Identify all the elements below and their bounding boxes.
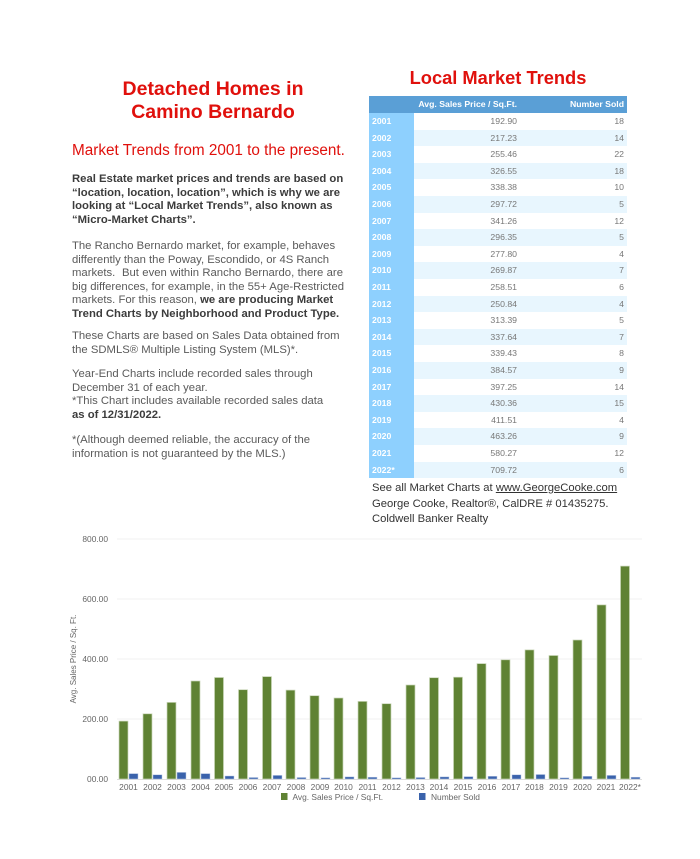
- table: yearly market data: 2006: [372, 199, 391, 209]
- y axis labels: [82, 534, 108, 784]
- table: yearly market data: 2008: [372, 232, 391, 242]
- table: yearly market data: 192.90: [490, 116, 517, 126]
- table: yearly market data: 7: [619, 332, 624, 342]
- title: [123, 78, 303, 123]
- table: yearly market data: 277.80: [490, 249, 517, 259]
- text block: disclaimer: [72, 434, 310, 460]
- text block: market differences: differently than the Poway, Escondido, or 4S Ranch: [72, 254, 329, 266]
- table: yearly market data: 463.26: [490, 431, 517, 441]
- table: yearly market data: 2015: [372, 348, 391, 358]
- table: yearly market data: 430.36: [490, 398, 517, 408]
- table: yearly market data: 2012: [372, 299, 391, 309]
- table: yearly market data: 341.26: [490, 216, 517, 226]
- table: yearly market data: 5: [619, 232, 624, 242]
- text block: market differences: The Rancho Bernardo market, for example, behaves: [72, 240, 335, 252]
- text block: market differences: Trend Charts by Neighborhood and Product Type.: [72, 308, 339, 320]
- table: yearly market data: 2016: [372, 365, 391, 375]
- table: yearly market data: 15: [614, 398, 624, 408]
- title: Detached Homes in: [123, 78, 303, 100]
- table: yearly market data: 338.38: [490, 182, 517, 192]
- x axis labels: 2012: [382, 782, 401, 792]
- x axis labels: 2020: [573, 782, 592, 792]
- table: yearly market data: 8: [619, 348, 624, 358]
- table: yearly market data: 326.55: [490, 166, 517, 176]
- table: yearly market data: 258.51: [490, 282, 517, 292]
- table: yearly market data: Number Sold: [570, 99, 624, 109]
- table: yearly market data: 709.72: [490, 465, 517, 475]
- table: yearly market data: 4: [619, 299, 624, 309]
- table: yearly market data: Avg. Sales Price / Sq.Ft.: [418, 99, 517, 109]
- table: yearly market data: 2022*: [372, 465, 395, 475]
- text block: market differences: markets. For this reason, we are producing Market: [72, 294, 333, 306]
- x axis labels: 2022*: [619, 782, 642, 792]
- text block: market differences: [72, 240, 344, 320]
- text block: intro: “location, location, location”, which is why we are: [72, 187, 340, 199]
- table: yearly market data: 250.84: [490, 299, 517, 309]
- table: yearly market data: 6: [619, 465, 624, 475]
- table: yearly market data: 313.39: [490, 315, 517, 325]
- table: yearly market data: 2014: [372, 332, 391, 342]
- text block: market differences: big differences, for example, in the 55+ Age-Restricted: [72, 281, 344, 293]
- table: yearly market data: 2017: [372, 382, 391, 392]
- text block: intro: Real Estate market prices and trends are based on: [72, 173, 343, 185]
- table: yearly market data: 339.43: [490, 348, 517, 358]
- x axis labels: 2003: [167, 782, 186, 792]
- text block: contact: [372, 482, 618, 525]
- text block: intro: [72, 173, 343, 226]
- table: yearly market data: 12: [614, 448, 624, 458]
- x axis labels: 2015: [454, 782, 473, 792]
- table: yearly market data: 2005: [372, 182, 391, 192]
- x axis labels: 2019: [549, 782, 568, 792]
- table: yearly market data: 2019: [372, 415, 391, 425]
- x axis labels: 2005: [215, 782, 234, 792]
- table: yearly market data: 12: [614, 216, 624, 226]
- table: yearly market data: 9: [619, 365, 624, 375]
- x axis labels: 2018: [525, 782, 544, 792]
- y axis labels: 00.00: [87, 774, 108, 784]
- table: yearly market data: 269.87: [490, 265, 517, 275]
- text block: contact: See all Market Charts at www.GeorgeCooke.com: [372, 482, 617, 494]
- number sold bars: [129, 772, 640, 779]
- legend: [281, 792, 480, 802]
- table: yearly market data: 7: [619, 265, 624, 275]
- text block: disclaimer: information is not guaranteed by the MLS.): [72, 448, 286, 460]
- text block: data source: These Charts are based on Sales Data obtained from: [72, 330, 340, 342]
- x axis labels: 2007: [263, 782, 282, 792]
- table: yearly market data: 4: [619, 415, 624, 425]
- text block: intro: “Micro-Market Charts”.: [72, 214, 196, 226]
- table: yearly market data: 5: [619, 315, 624, 325]
- x axis labels: 2011: [358, 782, 377, 792]
- x axis labels: [119, 782, 642, 792]
- text block: year-end note: as of 12/31/2022.: [72, 409, 161, 421]
- x axis labels: 2008: [287, 782, 306, 792]
- table: yearly market data: 2021: [372, 448, 391, 458]
- text block: year-end note: [72, 368, 324, 421]
- table: yearly market data: 18: [614, 116, 624, 126]
- table: yearly market data: 2004: [372, 166, 391, 176]
- table: yearly market data: 337.64: [490, 332, 517, 342]
- table: yearly market data: 4: [619, 249, 624, 259]
- table: yearly market data: 2010: [372, 265, 391, 275]
- x axis labels: 2002: [143, 782, 162, 792]
- table: yearly market data: 2003: [372, 149, 391, 159]
- table: yearly market data: 2002: [372, 133, 391, 143]
- table: yearly market data: 18: [614, 166, 624, 176]
- table: yearly market data: 580.27: [490, 448, 517, 458]
- table: yearly market data: 2007: [372, 216, 391, 226]
- bar chart: price and number sold: [69, 534, 642, 802]
- table: yearly market data: [369, 96, 627, 478]
- table: yearly market data: 297.72: [490, 199, 517, 209]
- x axis labels: 2001: [119, 782, 138, 792]
- table: yearly market data: 2009: [372, 249, 391, 259]
- table: yearly market data: 2001: [372, 116, 391, 126]
- table: yearly market data: 2018: [372, 398, 391, 408]
- text block: contact: Coldwell Banker Realty: [372, 513, 488, 525]
- text block: year-end note: December 31 of each year.: [72, 382, 208, 394]
- x axis labels: 2006: [239, 782, 258, 792]
- y axis labels: 400.00: [82, 654, 108, 664]
- x axis labels: 2013: [406, 782, 425, 792]
- x axis labels: 2004: [191, 782, 210, 792]
- price bars: [119, 566, 630, 779]
- title: Camino Bernardo: [131, 101, 295, 123]
- table: yearly market data: 10: [614, 182, 624, 192]
- table: yearly market data: 384.57: [490, 365, 517, 375]
- x axis labels: 2021: [597, 782, 616, 792]
- x axis labels: 2017: [502, 782, 521, 792]
- y axis labels: 600.00: [82, 594, 108, 604]
- text block: disclaimer: *(Although deemed reliable, the accuracy of the: [72, 434, 310, 446]
- table: yearly market data: 22: [614, 149, 624, 159]
- y axis labels: 200.00: [82, 714, 108, 724]
- heading: local market trends: Local Market Trends: [410, 67, 586, 88]
- y axis labels: 800.00: [82, 534, 108, 544]
- x axis labels: 2010: [334, 782, 353, 792]
- table: yearly market data: 2013: [372, 315, 391, 325]
- table: yearly market data: 397.25: [490, 382, 517, 392]
- text block: data source: the SDMLS® Multiple Listing System (MLS)*.: [72, 344, 298, 356]
- table: yearly market data: 2020: [372, 431, 391, 441]
- table: yearly market data: 296.35: [490, 232, 517, 242]
- y axis title: Avg. Sales Price / Sq. Ft.: [69, 615, 78, 703]
- table: yearly market data: 255.46: [490, 149, 517, 159]
- legend: Number Sold: [431, 792, 480, 802]
- text block: intro: looking at “Local Market Trends”, also known as: [72, 200, 333, 212]
- text block: data source: [72, 330, 340, 356]
- table: yearly market data: 14: [614, 382, 624, 392]
- table: yearly market data: 217.23: [490, 133, 517, 143]
- table: yearly market data: 5: [619, 199, 624, 209]
- x axis labels: 2009: [311, 782, 330, 792]
- table: yearly market data: 14: [614, 133, 624, 143]
- text block: year-end note: Year-End Charts include recorded sales through: [72, 368, 313, 380]
- text block: year-end note: *This Chart includes available recorded sales data: [72, 395, 323, 407]
- x axis labels: 2016: [478, 782, 497, 792]
- subtitle: Market Trends from 2001 to the present.: [72, 142, 345, 159]
- text block: contact: George Cooke, Realtor®, CalDRE # 01435275.: [372, 498, 609, 510]
- table: yearly market data: 2011: [372, 282, 391, 292]
- table: yearly market data: 411.51: [491, 415, 517, 425]
- x axis labels: 2014: [430, 782, 449, 792]
- table: yearly market data: 6: [619, 282, 624, 292]
- text block: market differences: markets. But even within Rancho Bernardo, there are: [72, 267, 343, 279]
- table: yearly market data: 9: [619, 431, 624, 441]
- legend: Avg. Sales Price / Sq.Ft.: [292, 792, 383, 802]
